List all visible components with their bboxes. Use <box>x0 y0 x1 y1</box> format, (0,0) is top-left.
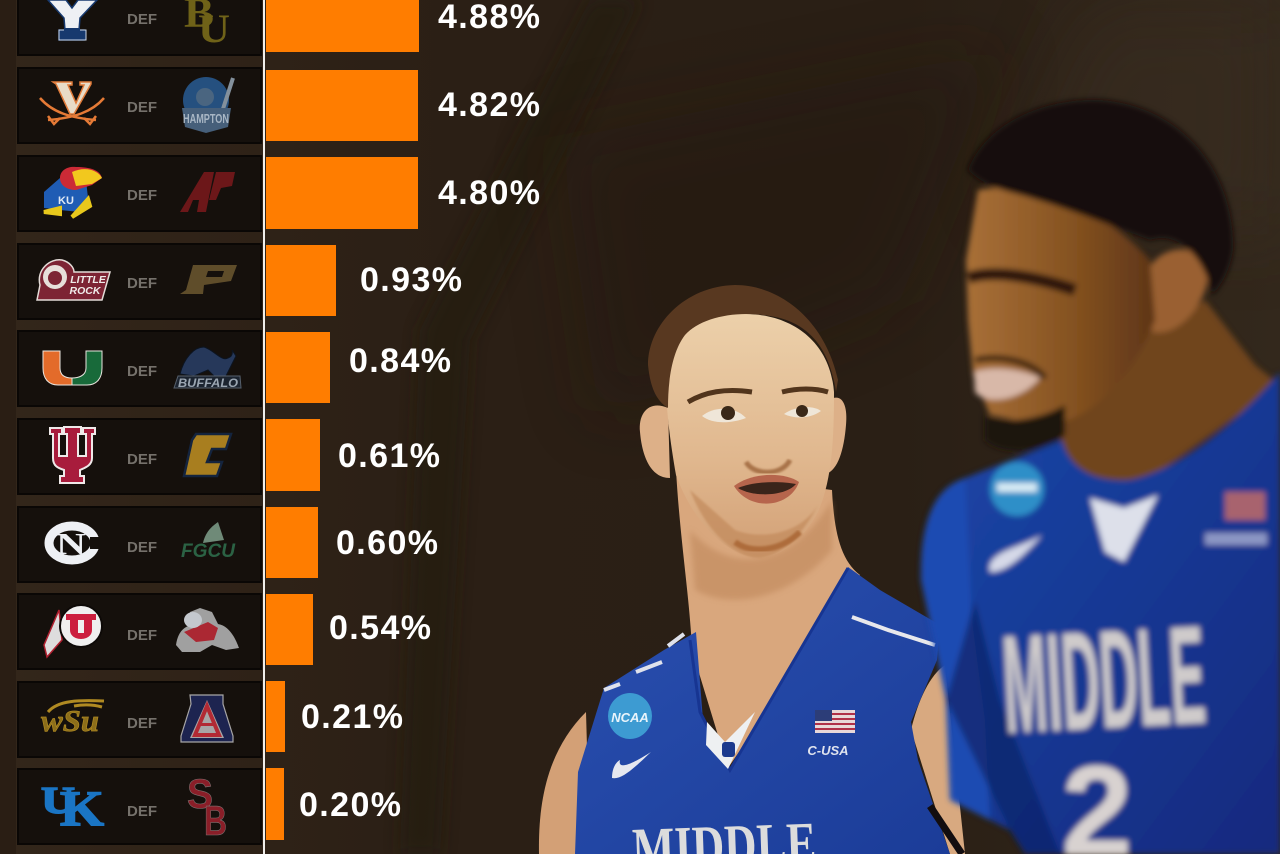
collar mark <box>1090 495 1158 562</box>
value 4.82%: 4.82% <box>438 86 541 124</box>
DEF: DEF <box>127 99 157 116</box>
face <box>966 188 1155 425</box>
Stony Brook logo <box>187 770 227 844</box>
ear <box>1148 249 1208 333</box>
C-USA: C-USA <box>807 743 849 758</box>
Hampton logo: HAMPTON <box>183 111 229 126</box>
DEF: DEF <box>127 803 157 820</box>
bar 0.61% <box>266 419 320 491</box>
swoosh blur <box>990 535 1042 572</box>
arm strap <box>930 806 962 854</box>
DEF: DEF <box>127 363 157 380</box>
Buffalo logo <box>174 347 241 390</box>
FGCU logo: FGCU <box>181 541 236 562</box>
ears <box>640 405 670 478</box>
DEF: DEF <box>127 715 157 732</box>
Purdue logo <box>180 265 237 294</box>
player: Middle Tennessee player in foreground, smiling <box>539 285 965 854</box>
Miami logo <box>43 351 102 385</box>
bar 0.84% <box>266 332 330 403</box>
value 0.84%: 0.84% <box>349 342 452 380</box>
matchup row: Utah def Fresno State <box>18 594 261 669</box>
beard <box>985 405 1065 451</box>
Kentucky logo: U <box>41 780 75 822</box>
neck <box>676 470 860 768</box>
Kentucky logo: K <box>60 780 104 836</box>
North Carolina logo: N <box>56 526 86 561</box>
jersey <box>575 567 950 854</box>
matchup row: Miami def Buffalo <box>18 331 261 406</box>
goatee <box>735 532 800 549</box>
right arm <box>911 665 965 854</box>
eyes <box>702 409 746 422</box>
divider axis line <box>263 0 265 854</box>
Arizona logo <box>181 695 233 742</box>
matchup row: Virginia def Hampton <box>18 68 261 143</box>
Stony Brook logo: S <box>187 770 213 817</box>
Indiana logo <box>50 427 95 483</box>
Kansas logo: KU <box>58 195 74 207</box>
value 0.60%: 0.60% <box>336 524 439 562</box>
bar 4.80% <box>266 157 418 229</box>
neck <box>1060 300 1280 500</box>
matchup row: Kentucky def Stony Brook <box>18 769 261 844</box>
Kansas logo <box>44 167 102 217</box>
DEF: DEF <box>127 451 157 468</box>
bar 4.88% <box>266 0 419 52</box>
Wichita State logo: wSu <box>41 703 99 738</box>
eye shadow <box>968 274 1075 290</box>
eyebrows <box>688 389 828 402</box>
face <box>666 314 834 558</box>
bar 4.82% <box>266 70 418 141</box>
bar 0.93% <box>266 245 336 316</box>
DEF: DEF <box>127 11 157 28</box>
flag <box>815 710 855 733</box>
bar 0.60% <box>266 507 318 578</box>
hair <box>968 100 1233 295</box>
value 0.21%: 0.21% <box>301 698 404 736</box>
value 0.93%: 0.93% <box>360 261 463 299</box>
Hampton logo <box>182 77 233 133</box>
shoulder stripes <box>852 617 935 645</box>
bar 0.20% <box>266 768 284 840</box>
Little Rock logo: ROCK <box>70 285 102 297</box>
Buffalo logo: BUFFALO <box>178 376 239 390</box>
Kentucky logo <box>41 780 104 836</box>
lip <box>974 369 1040 400</box>
matchup row: BYU def Baylor <box>18 0 261 55</box>
matchup row: Indiana def Chattanooga <box>18 419 261 494</box>
mouth <box>734 475 799 504</box>
Virginia logo <box>40 82 104 124</box>
North Carolina logo <box>49 526 102 561</box>
Stony Brook logo: B <box>204 797 227 844</box>
Fresno State logo <box>176 608 239 652</box>
hair <box>648 285 838 408</box>
collar inset <box>706 712 755 769</box>
value 0.20%: 0.20% <box>299 786 402 824</box>
player: blurred Middle Tennessee player on the right <box>921 100 1280 854</box>
Chattanooga logo <box>184 434 231 476</box>
matchup row: Wichita State def Arizona <box>18 682 261 757</box>
Austin Peay logo <box>180 172 235 212</box>
DEF: DEF <box>127 187 157 204</box>
value 0.61%: 0.61% <box>338 437 441 475</box>
left arm <box>539 712 590 854</box>
BYU logo <box>48 0 97 40</box>
value 0.54%: 0.54% <box>329 609 432 647</box>
Little Rock logo: LITTLE <box>70 274 107 286</box>
swoosh <box>612 752 651 778</box>
DEF: DEF <box>127 275 157 292</box>
matchup row: Kansas def Austin Peay <box>18 156 261 231</box>
bar 0.54% <box>266 594 313 665</box>
player: Middle Tennessee player in foreground, smiling: NCAA <box>611 710 649 725</box>
C-USA <box>1205 533 1267 545</box>
bar 0.21% <box>266 681 285 752</box>
matchup row: North Carolina def FGCU <box>18 507 261 582</box>
flag <box>1225 492 1265 520</box>
DEF: DEF <box>127 627 157 644</box>
matchup row: Little Rock def Purdue <box>18 244 261 319</box>
Baylor logo <box>184 0 230 51</box>
ncaa patch blur <box>990 462 1044 516</box>
Little Rock logo <box>37 260 110 300</box>
Utah logo <box>44 605 102 657</box>
DEF: DEF <box>127 539 157 556</box>
value 4.80%: 4.80% <box>438 174 541 212</box>
nose <box>746 460 790 472</box>
Baylor logo: U <box>198 6 230 51</box>
NCAA patch <box>608 693 652 739</box>
jersey <box>921 372 1280 854</box>
FGCU logo <box>181 522 236 562</box>
